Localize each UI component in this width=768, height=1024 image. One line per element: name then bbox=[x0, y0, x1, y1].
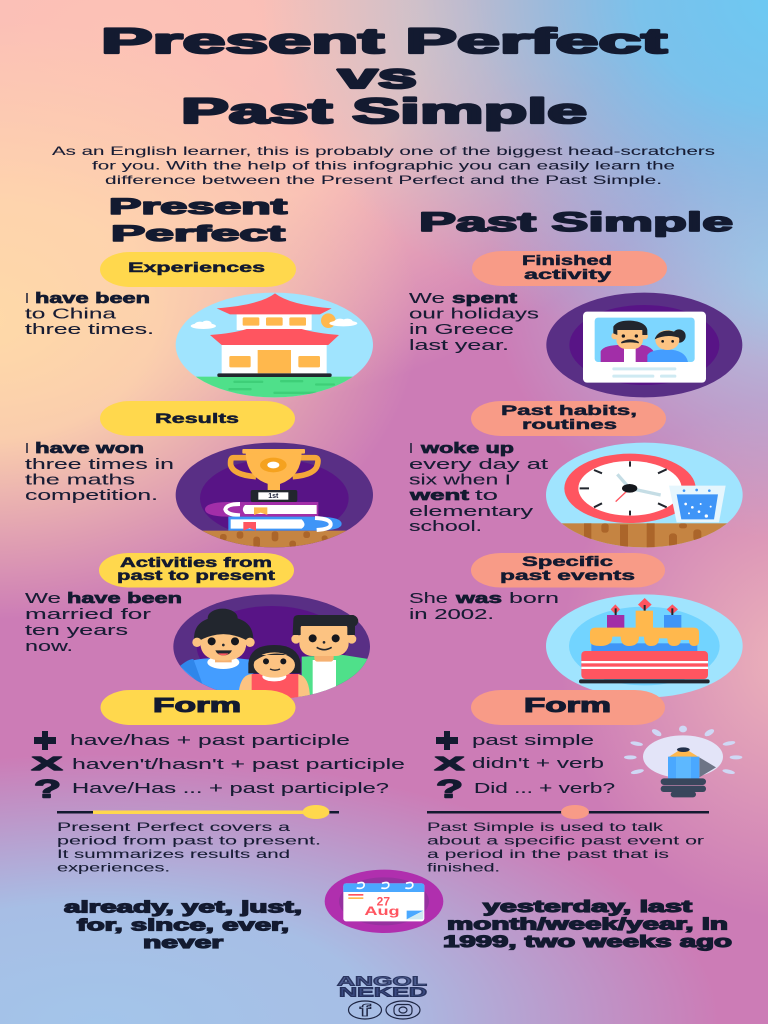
logo: Angol Neked: NEKED bbox=[339, 984, 427, 1000]
example: have been: to China bbox=[25, 306, 117, 322]
intro text: As an English learner, this is probably one of the biggest head-scratchers bbox=[52, 144, 715, 158]
logo: Angol Neked: ANGOL bbox=[337, 974, 427, 988]
pill: activities bbox=[99, 553, 294, 588]
example: have been: have been bbox=[35, 291, 150, 307]
time expressions: present perfect: for, since, ever, bbox=[77, 916, 289, 934]
pill: specific past events: Specific bbox=[522, 553, 613, 569]
pill: finished activity bbox=[472, 251, 667, 286]
heading: present perfect: Present bbox=[109, 194, 288, 219]
pill: results bbox=[100, 401, 295, 436]
description: present perfect: experiences. bbox=[57, 860, 170, 874]
pill: activities: past to present bbox=[117, 567, 276, 583]
timeline: period to present bbox=[57, 805, 339, 819]
icon: birthday cake bbox=[546, 594, 743, 698]
icon: calendar: 27 bbox=[377, 894, 390, 908]
pill: form bbox=[100, 690, 296, 725]
intro text: for you. With the help of this infographic you can easily learn the bbox=[92, 158, 676, 172]
timeline: past event bbox=[427, 805, 709, 819]
panel: present perfect bbox=[25, 194, 405, 952]
example: have won: competition. bbox=[25, 488, 158, 504]
description: past simple: Past Simple is used to talk bbox=[427, 820, 665, 834]
example: was born: She bbox=[409, 591, 448, 607]
description: past simple bbox=[427, 820, 704, 874]
example: have been bbox=[25, 291, 154, 338]
heading: present perfect: Perfect bbox=[111, 221, 287, 246]
icon: facebook bbox=[348, 1001, 382, 1020]
description: past simple: finished. bbox=[427, 860, 500, 874]
pill: past habits bbox=[471, 401, 666, 436]
example: woke up: elementary bbox=[409, 504, 534, 520]
logo: Angol Neked bbox=[337, 974, 427, 1000]
icon: cross: X bbox=[435, 753, 466, 774]
icon: pagoda bbox=[167, 293, 380, 400]
pill: finished activity: Finished bbox=[522, 252, 612, 268]
pill: experiences bbox=[100, 252, 296, 287]
description: present perfect: period from past to present. bbox=[57, 834, 321, 848]
example: have been: three times. bbox=[25, 322, 154, 338]
time expressions: present perfect: never bbox=[143, 934, 224, 952]
icon: plus bbox=[436, 731, 458, 750]
form rules: have/has + past participle bbox=[70, 733, 350, 749]
example: have been married bbox=[25, 591, 182, 655]
example: have been married: married for bbox=[25, 607, 151, 623]
icon: calendar bbox=[325, 870, 443, 933]
example: woke up: went bbox=[408, 488, 469, 504]
icon: clock and glass bbox=[544, 443, 744, 550]
example: spent: last year. bbox=[409, 338, 509, 354]
example: have been married: now. bbox=[25, 639, 73, 655]
heading: present perfect bbox=[109, 194, 288, 246]
icon: instagram bbox=[386, 1001, 420, 1019]
icon: facebook: f bbox=[360, 1001, 371, 1020]
icon: pencil light bulb bbox=[624, 726, 742, 797]
pill: specific past events bbox=[471, 553, 665, 588]
pill: finished activity: activity bbox=[524, 266, 611, 282]
icon: family bbox=[173, 594, 370, 701]
example: have won: three times in bbox=[25, 457, 174, 473]
example: woke up bbox=[408, 441, 548, 535]
time expressions: past simple: month/week/year, in bbox=[447, 916, 728, 934]
pill: results: Results bbox=[155, 410, 239, 426]
example: woke up: to bbox=[475, 488, 498, 504]
icon: family photo bbox=[546, 293, 742, 397]
title: vs bbox=[338, 56, 417, 96]
example: spent: spent bbox=[452, 291, 517, 307]
pill: specific past events: past events bbox=[500, 567, 635, 583]
example: spent bbox=[409, 291, 539, 354]
example: have been married: ten years bbox=[25, 623, 128, 639]
example: have been married: We bbox=[25, 591, 61, 607]
example: have won: have won bbox=[35, 441, 144, 457]
example: was born: in 2002. bbox=[409, 607, 494, 623]
form rules: past simple bbox=[472, 733, 594, 749]
title: Past Simple bbox=[181, 91, 587, 131]
example: woke up: six when I bbox=[409, 472, 511, 488]
pill: form: Form bbox=[524, 695, 611, 717]
example: was born: was bbox=[454, 591, 502, 607]
description: present perfect: It summarizes results and bbox=[57, 847, 290, 861]
icon: question mark: ? bbox=[436, 776, 463, 804]
time expressions: past simple bbox=[443, 898, 732, 951]
example: woke up: woke up bbox=[419, 441, 514, 457]
time expressions: past simple: yesterday, last bbox=[483, 898, 693, 916]
form rules bbox=[435, 731, 615, 804]
example: have won bbox=[25, 441, 174, 504]
description: present perfect: Present Perfect covers a bbox=[57, 820, 291, 834]
heading: past simple: Past Simple bbox=[419, 207, 733, 237]
example: have won: I bbox=[25, 441, 29, 457]
pill: past habits: Past habits, bbox=[501, 402, 637, 418]
example: spent: We bbox=[409, 291, 445, 307]
icon: question mark: ? bbox=[34, 776, 61, 804]
icon: trophy on books: 1st bbox=[268, 493, 279, 500]
example: have won: the maths bbox=[25, 472, 135, 488]
panel: past simple bbox=[408, 207, 744, 951]
pill: past habits: routines bbox=[522, 416, 617, 432]
pill: activities: Activities from bbox=[120, 554, 272, 570]
pill: form: Form bbox=[153, 695, 241, 717]
example: have been married: have been bbox=[67, 591, 182, 607]
title bbox=[101, 21, 667, 131]
form rules: Did ... + verb? bbox=[474, 781, 615, 797]
form rules: haven't/hasn't + past participle bbox=[72, 757, 405, 773]
icon: cross: X bbox=[32, 753, 64, 774]
example: woke up: every day at bbox=[409, 457, 548, 473]
description: past simple: about a specific past event or bbox=[427, 834, 704, 848]
intro text: difference between the Present Perfect and the Past Simple. bbox=[105, 173, 662, 187]
time expressions: past simple: 1999, two weeks ago bbox=[443, 933, 732, 951]
example: woke up: I bbox=[409, 441, 413, 457]
pill: experiences: Experiences bbox=[128, 259, 265, 275]
form rules: didn't + verb bbox=[472, 756, 604, 772]
intro text bbox=[52, 144, 715, 187]
title: Present Perfect bbox=[101, 21, 667, 61]
icon: trophy on books bbox=[167, 443, 380, 551]
example: was born: born bbox=[509, 591, 559, 607]
time expressions: present perfect bbox=[64, 898, 302, 952]
example: woke up: school. bbox=[409, 519, 482, 535]
pill: form bbox=[471, 690, 665, 725]
form rules: Have/Has ... + past participle? bbox=[72, 781, 389, 797]
example: have been: I bbox=[25, 291, 29, 307]
description: past simple: a period in the past that is bbox=[427, 847, 669, 861]
time expressions: present perfect: already, yet, just, bbox=[64, 898, 302, 916]
icon: calendar: Aug bbox=[364, 904, 400, 918]
example: spent: in Greece bbox=[409, 322, 514, 338]
description: present perfect bbox=[57, 820, 321, 874]
example: spent: our holidays bbox=[409, 306, 539, 322]
form rules bbox=[32, 731, 405, 804]
example: was born bbox=[409, 591, 559, 623]
icon: plus bbox=[34, 731, 56, 750]
